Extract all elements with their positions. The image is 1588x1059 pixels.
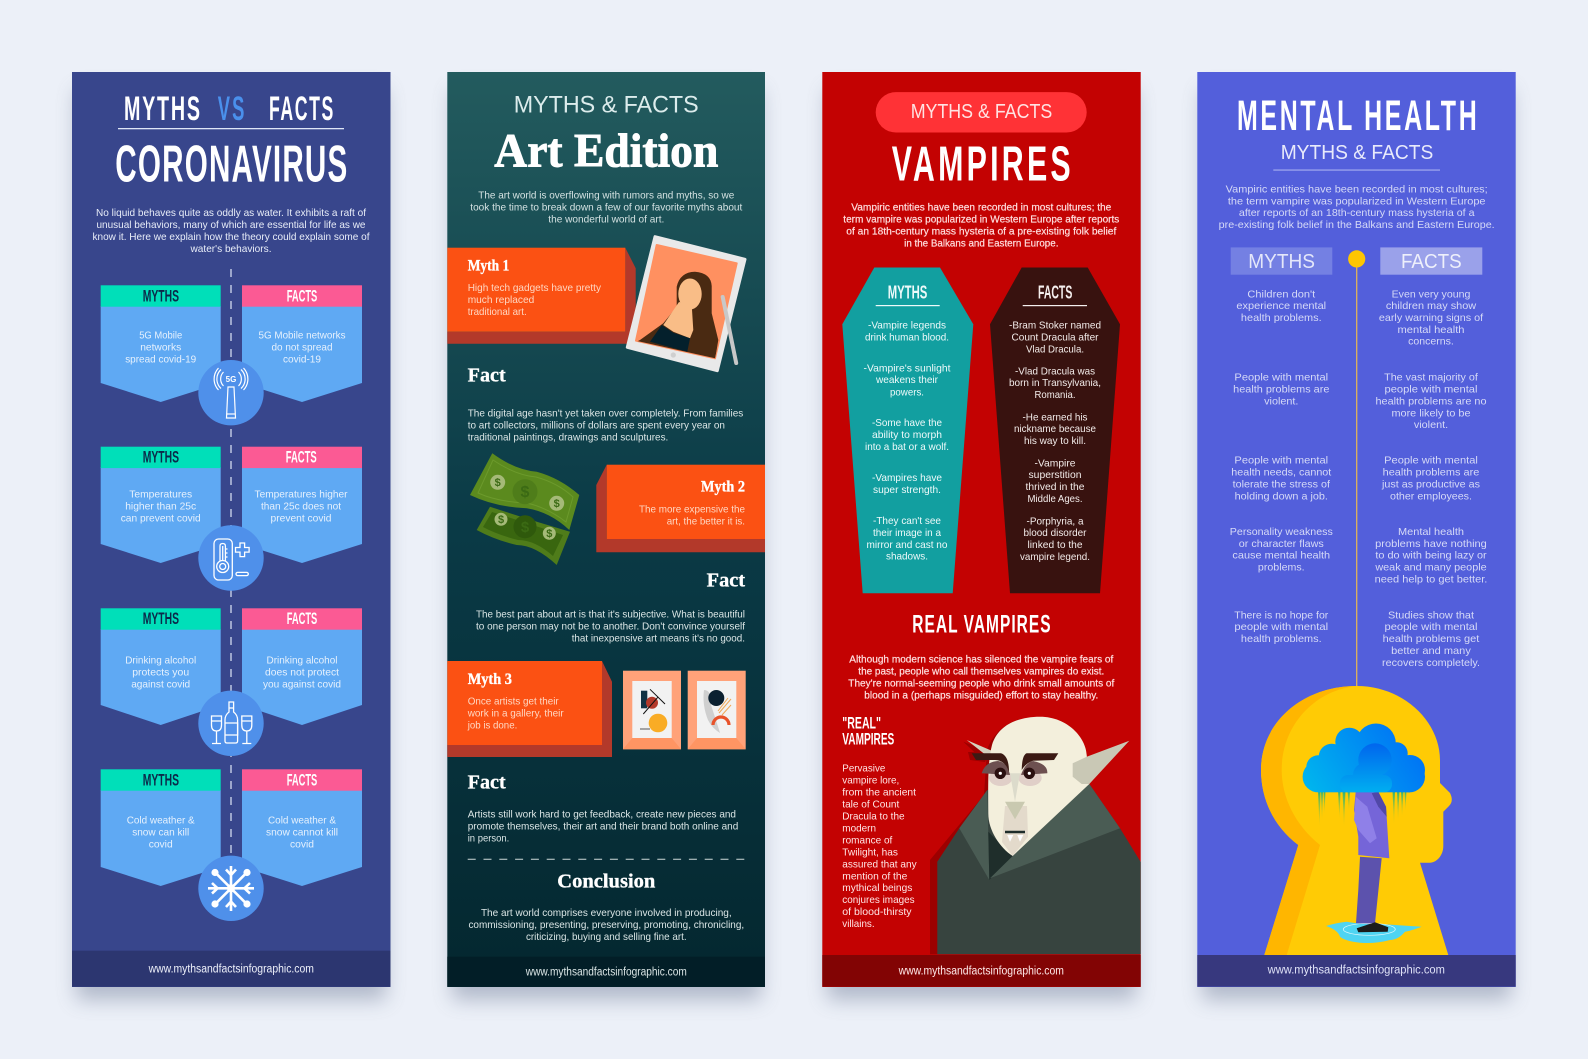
header: myths: MYTHS [1248,251,1315,273]
conclusion text: criticizing, buying and selling fine art. [526,931,687,943]
row 2: fact card: Temperatures higher [254,489,348,501]
coffin: myths: MYTHS [888,283,927,303]
coffin: facts: blood disorder [1024,527,1087,539]
conclusion text: commissioning, presenting, preserving, promoting, chronicling, [468,919,744,931]
fact text 1: to art collectors, millions of dollars are spent every year on [468,420,725,432]
footer [72,951,390,987]
intro text [843,202,1119,249]
sidebar heading [842,714,894,748]
illustration: dollar bills: $ [546,528,552,540]
sidebar text: assured that any [842,858,917,870]
coffin: myths: drink human blood. [865,331,949,343]
facts column: to do with being lazy or [1375,550,1487,562]
coffin: myths: -Vampire's sunlight [864,362,951,374]
row 2: fact card: than 25c does not [261,501,341,513]
sidebar text: modern [842,822,876,834]
row 1: fact card: 5G Mobile networks [258,329,346,341]
myths column: There is no hope for [1234,609,1329,621]
real vampires text: They're normal-seeming people who drink small amounts of [848,677,1114,689]
facts column: recovers completely. [1382,657,1480,669]
icon: 5G tower: 5G [226,375,236,384]
row 1: fact card [242,285,362,402]
myth 1 banner [447,248,636,344]
illustration: framed art 2 [688,671,746,749]
row 3: myth card: MYTHS [143,609,179,628]
coffin: facts: thrived in the [1026,481,1085,493]
panel: vampires [822,72,1141,987]
myths column: cause mental health [1232,550,1330,562]
myths column: Personality weakness [1230,526,1333,538]
facts column: weak and many people [1374,562,1487,574]
heading: conclusion: Conclusion [557,871,655,893]
fact text 2: that inexpensive art means it's no good. [572,632,745,644]
coffin: myths: -Vampires have [872,472,942,484]
coffin: myths: -Vampire legends [868,320,946,332]
footer [447,957,765,987]
coffin: facts: Middle Ages. [1028,493,1082,505]
pill: myths and facts: MYTHS & FACTS [911,101,1052,123]
coffin: myths: weakens their [875,374,938,386]
illustration: tablet with portrait [627,237,745,371]
sidebar text: mention of the [842,870,907,882]
myth 3 banner: Once artists get their [468,695,559,707]
heading: fact: Fact [468,365,506,387]
coffin: myths: powers. [890,386,924,398]
row 4: fact card: snow cannot kill [266,826,338,838]
sidebar text: of blood-thirsty [842,906,912,918]
row 4: fact card: Cold weather & [268,814,336,826]
myths column: violent. [1264,395,1298,407]
title: myths vs facts: FACTS [269,89,333,128]
illustration: vampire [930,717,1141,954]
sidebar text [842,763,917,930]
coffin: myths: into a bat or a wolf. [865,441,949,453]
coffin: facts: Romania. [1034,389,1076,401]
icon: wine bottle and glasses [198,691,264,756]
myths column: health needs, cannot [1231,467,1331,479]
row 1: myth card: MYTHS [143,287,179,306]
myths column: People with mental [1234,372,1328,384]
sidebar text: Pervasive [842,763,885,775]
myths column [1230,288,1333,645]
facts column: people with mental [1384,621,1478,633]
panel: mental health [1197,72,1516,987]
myth 3 banner: work in a gallery, their [467,707,564,719]
row 1: myth card: spread covid-19 [125,353,196,365]
title: myths vs facts: MYTHS [124,89,200,127]
row 1: myth card: networks [140,341,181,353]
facts column: Even very young [1392,288,1471,300]
title: myths vs facts: VS [218,89,244,127]
coffin: facts: -Bram Stoker named [1009,320,1101,332]
fact text 2 [476,608,745,644]
sidebar text: tale of Count [842,799,899,811]
title: vampires: VAMPIRES [892,136,1071,191]
sidebar text: romance of [842,834,892,846]
fact text 3: Artists still work hard to get feedback, create new pieces and [468,809,736,821]
row 3: fact card: you against covid [263,678,341,690]
header: facts: FACTS [1401,251,1462,273]
facts column: children may show [1386,300,1477,312]
coffin: myths: mirror and cast no [866,539,948,551]
row 4: fact card: covid [290,838,314,850]
facts column: The vast majority of [1384,372,1478,384]
fact text 3 [468,809,738,845]
intro text: Vampiric entities have been recorded in most cultures; [1226,184,1488,196]
row 4: myth card: snow can kill [132,826,189,838]
facts column: early warning signs of [1379,312,1483,324]
myths column: tolerate the stress of [1233,478,1330,490]
facts column [1374,288,1487,669]
illustration: dollar bills: $ [554,498,560,510]
myth 2 banner [596,465,765,552]
row 3: fact card: does not protect [265,666,339,678]
sidebar text: mythical beings [842,882,912,894]
illustration: dollar bills: $ [495,477,501,489]
header: myths [1231,247,1332,275]
row 1: fact card: covid-19 [283,353,321,365]
myths column: health problems are [1233,384,1330,396]
myth 2 banner: The more expensive the [639,503,745,515]
coffin: facts: -Vampire [1034,457,1076,469]
facts column: just as productive as [1381,478,1480,490]
myths column: Children don't [1247,288,1315,300]
fact text 1: traditional paintings, drawings and sculptures. [468,432,668,444]
sidebar text: Dracula to the [842,810,905,822]
row 4: fact card [242,769,362,886]
conclusion text: The art world comprises everyone involved in producing, [481,907,732,919]
facts column: Studies show that [1388,609,1474,621]
heading: fact: Fact [707,570,745,592]
facts column: health problems are no [1376,395,1487,407]
facts column: People with mental [1384,455,1478,467]
coffin: myths: shadows. [886,551,928,563]
facts column: better and many [1391,645,1472,657]
row 4: myth card: covid [149,838,173,850]
intro text [470,190,742,226]
myth 1 banner: traditional art. [468,306,527,318]
myths column: problems. [1258,562,1305,574]
pill: myths and facts [876,92,1087,132]
fact text 3: in person. [468,833,509,845]
title: art edition: Art Edition [494,125,718,178]
subtitle: MYTHS & FACTS [1281,142,1433,164]
intro text: in the Balkans and Eastern Europe. [904,237,1058,249]
intro text: water's behaviors. [190,243,272,255]
facts column: problems have nothing [1375,538,1487,550]
row 3: myth card: Drinking alcohol [125,654,196,666]
myths column: or character flaws [1239,538,1324,550]
icon: snowflake [198,856,264,921]
intro text: The art world is overflowing with rumors and myths, so we [478,190,734,202]
intro text: of an 18th-century mass hysteria of a pre-existing folk belief [846,226,1116,238]
coffin: myths: their image in a [873,527,941,539]
illustration: keyhole head with rain cloud [1261,686,1452,955]
footer [1197,955,1516,987]
sidebar text: villains. [842,918,875,930]
figure: person [1326,792,1422,943]
fact text 1: The digital age hasn't yet taken over completely. From families [468,408,743,420]
illustration: framed art 1 [623,671,681,749]
myth 3 banner: job is done. [467,719,517,731]
illustration: dollar bills: $ [521,519,530,536]
intro text: know it. Here we explain how the theory could explain some of [92,231,370,243]
myths column: health problems. [1241,633,1322,645]
facts column: mental health [1398,324,1465,336]
row 4: myth card: Cold weather & [127,814,195,826]
coffin: facts: -Vlad Dracula was [1015,365,1095,377]
title: mental health: MENTAL HEALTH [1237,92,1477,140]
facts column: people with mental [1384,384,1478,396]
row 2: myth card: can prevent covid [121,513,201,525]
coffin: myths [842,268,973,593]
icon: 5G tower [198,360,264,425]
intro text: pre-existing folk belief in the Balkans and Eastern Europe. [1219,219,1495,231]
sidebar text: from the ancient [842,787,916,799]
row 2: myth card: higher than 25c [125,501,196,513]
intro text: after reports of an 18th-century mass hysteria of a [1239,207,1475,219]
header: facts [1380,247,1482,275]
footer: www.mythsandfactsinfographic.com [1267,964,1445,976]
intro text [1219,184,1495,231]
row 3: fact card: FACTS [287,609,317,628]
illustration: dollar bills: $ [498,514,504,526]
real vampires text: Although modern science has silenced the vampire fears of [849,653,1113,665]
myths column: health problems. [1241,312,1322,324]
myths column: experience mental [1236,300,1326,312]
coffin: facts: -Porphyria, a [1026,515,1084,527]
intro text: the wonderful world of art. [548,214,664,226]
myth 2 banner: art, the better it is. [667,515,745,527]
intro text: the term vampire was popularized in Western Europe [1228,195,1486,207]
panel: art edition [447,72,765,987]
coffin: myths: super strength. [873,484,941,496]
fact text 2: to one person may not be to another. Don't convince yourself [476,620,745,632]
row 2: fact card [242,447,362,563]
facts column: need help to get better. [1375,574,1487,586]
row 2: myth card: MYTHS [143,448,179,467]
row 3: fact card: Drinking alcohol [266,654,338,666]
row 2: fact card: prevent covid [270,513,332,525]
title: coronavirus: CORONAVIRUS [115,135,347,193]
row 4: myth card: MYTHS [143,771,179,790]
coffin: facts: nickname because [1014,423,1096,435]
coffin: myths: -They can't see [873,515,941,527]
subtitle: MYTHS & FACTS [514,91,699,118]
coffin: facts: superstition [1028,469,1082,481]
coffin: facts: Vlad Dracula. [1026,344,1084,356]
row 3: fact card [242,608,362,725]
myths column: holding down a job. [1235,490,1328,502]
row 1: myth card [101,285,221,402]
fact text 1 [468,408,743,444]
row 4: myth card [101,769,221,886]
facts column: more likely to be [1392,407,1471,419]
sidebar heading: VAMPIRES [842,729,894,748]
sidebar text: Twilight, has [842,846,898,858]
coffin: facts: FACTS [1038,283,1072,303]
row 1: fact card: do not spread [272,341,333,353]
footer: www.mythsandfactsinfographic.com [898,966,1064,978]
intro text: unusual behaviors, many of which are essential for life as we [96,219,366,231]
row 1: myth card: 5G Mobile [139,329,182,341]
row 2: myth card [101,447,221,563]
intro text: term vampire was popularized in Western Europe after reports [843,214,1119,226]
myths column: people with mental [1234,621,1328,633]
timeline [1348,250,1365,687]
coffin: facts: his way to kill. [1024,435,1086,447]
intro text: Vampiric entities have been recorded in most cultures; the [851,202,1111,214]
coffin: myths: -Some have the [872,417,942,429]
row 1: fact card: FACTS [287,287,317,306]
intro text: took the time to break down a few of our favorite myths about [470,202,742,214]
coffin: facts: vampire legend. [1020,551,1090,563]
footer: www.mythsandfactsinfographic.com [525,967,687,979]
row 2: fact card: FACTS [286,448,317,467]
facts column: other employees. [1390,490,1472,502]
facts column: health problems are [1383,467,1480,479]
conclusion text [468,907,744,943]
row 2: myth card: Temperatures [129,489,192,501]
fact text 3: promote themselves, their art and their brand both online and [468,821,738,833]
coffin: facts: Count Dracula after [1012,331,1099,343]
heading: real vampires: REAL VAMPIRES [912,611,1051,639]
title: myths vs facts [124,89,333,128]
fact text 2: The best part about art is that it's subjective. What is beautiful [476,608,745,620]
myth 1 banner: much replaced [468,294,534,306]
intro text: No liquid behaves quite as oddly as water. It exhibits a raft of [96,207,366,219]
coffin: facts: linked to the [1028,539,1083,551]
row 3: myth card: against covid [131,678,190,690]
coffin: facts: born in Transylvania, [1009,377,1101,389]
sidebar text: vampire lore, [842,775,899,787]
intro text [92,207,370,255]
sidebar text: conjures images [842,894,915,906]
sidebar heading: "REAL" [842,714,881,733]
figure: cloud [1303,724,1425,792]
myth 1 banner: High tech gadgets have pretty [468,282,602,294]
coffin: myths: ability to morph [872,429,942,441]
row 3: myth card [101,608,221,725]
facts column: violent. [1414,419,1448,431]
footer [822,955,1141,987]
myth 3 banner [447,661,612,757]
illustration: dollar bills [470,453,579,565]
heading: fact: Fact [468,772,506,794]
myth 1 banner: Myth 1 [468,258,509,275]
facts column: health problems get [1383,633,1479,645]
real vampires text: blood in a (perhaps misguided) effort to stay healthy. [864,689,1098,701]
real vampires text: the past, people who call themselves vampires do exist. [858,665,1104,677]
row 4: fact card: FACTS [287,771,317,790]
facts column: Mental health [1398,526,1464,538]
real vampires text [848,653,1114,701]
coffin: facts: -He earned his [1022,411,1088,423]
illustration: dollar bills: $ [521,484,530,501]
row 3: myth card: protects you [132,666,189,678]
coffin: facts [990,268,1120,593]
facts column: concerns. [1408,336,1454,348]
footer: www.mythsandfactsinfographic.com [148,964,314,976]
myths column: People with mental [1234,455,1328,467]
myth 2 banner: Myth 2 [701,479,745,496]
panel: coronavirus [72,72,390,987]
myth 3 banner: Myth 3 [468,671,512,688]
icon: thermometer [198,525,264,591]
